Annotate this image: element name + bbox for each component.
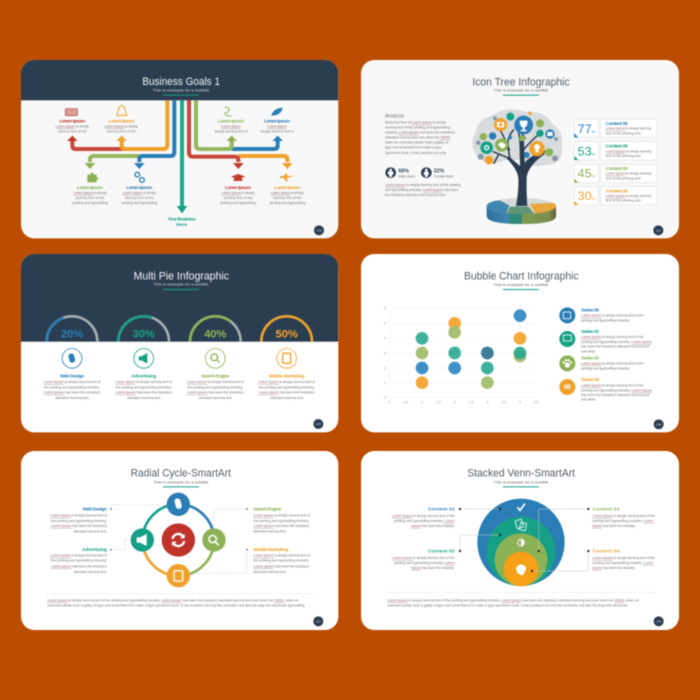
bubble chart: 6 bbox=[384, 307, 386, 311]
legend: printing and typesetting industry. Lorem Ipsum bbox=[581, 388, 652, 392]
analysis text: Body text here at Lorem Ipsum is simply bbox=[385, 121, 446, 125]
ring: 30% bbox=[118, 316, 169, 342]
ring: 40% bbox=[190, 316, 241, 342]
bubble chart: 4 bbox=[384, 337, 386, 341]
stat rows: text of the printing and bbox=[606, 131, 641, 135]
title: Business Goals 1 bbox=[142, 76, 220, 88]
callout: advertising bbox=[50, 547, 112, 574]
callout: web design: Lorem Ipsum has been the industry's bbox=[51, 524, 107, 528]
callout: mobile marketing: Lorem Ipsum is simply dummy text of bbox=[253, 554, 311, 558]
callout: search engine: Lorem Ipsum is simply dummy text of bbox=[253, 514, 311, 518]
column: web design: Lorem Ipsum has been the industry's bbox=[44, 391, 100, 395]
stat rows: % bbox=[592, 129, 596, 134]
callout: content 02: Content 02 bbox=[428, 549, 455, 555]
title underline bbox=[503, 288, 539, 291]
column: advertising bbox=[115, 348, 173, 400]
labels: dummy text of the bbox=[223, 196, 252, 200]
subtitle: This is example for a subtitle bbox=[493, 88, 549, 93]
column: advertising: Lorem Ipsum is simply dummy text of bbox=[115, 380, 173, 384]
labels: printing and typesetting bbox=[72, 201, 108, 205]
stat rows: text of the printing and bbox=[606, 176, 641, 180]
legend: Lorem Ipsum is simply dummy text of the bbox=[581, 361, 644, 365]
venn diagram bbox=[477, 499, 565, 586]
bubble chart: 1 bbox=[384, 381, 386, 385]
title: Radial Cycle-SmartArt bbox=[131, 468, 232, 480]
page number bbox=[654, 419, 664, 429]
ring: 50%: 50% bbox=[275, 328, 298, 340]
stat rows: % bbox=[592, 151, 596, 156]
footer text bbox=[387, 598, 639, 607]
stat rows: % bbox=[592, 174, 596, 179]
arrow network bbox=[67, 100, 293, 213]
bubble chart bbox=[384, 307, 539, 405]
column: search engine: Lorem Ipsum is simply dummy text of bbox=[187, 380, 245, 384]
series: blue bbox=[416, 309, 526, 374]
page number bbox=[654, 616, 664, 626]
legend: Lorem Ipsum is simply dummy text of the bbox=[581, 335, 644, 339]
callout: advertising: Lorem Ipsum is simply dummy text of bbox=[50, 554, 108, 558]
column: advertising: Advertising bbox=[131, 374, 156, 380]
labels: Lorem Ipsum bbox=[108, 118, 134, 124]
callout: search engine bbox=[246, 507, 311, 533]
callout: advertising: Advertising bbox=[82, 547, 107, 553]
labels: printing and typesetting bbox=[121, 201, 157, 205]
panel: Radial Cycle-SmartArt bbox=[21, 451, 338, 630]
panel: Stacked Venn-SmartArt bbox=[361, 451, 679, 630]
callout: content 02: Lorem Ipsum is simply dummy text of the bbox=[392, 556, 455, 560]
labels: Lorem Ipsum is simply bbox=[105, 124, 138, 128]
connectors bbox=[460, 509, 588, 571]
title underline bbox=[503, 94, 539, 97]
legend: Lorem Ipsum is simply dummy text of the bbox=[581, 314, 644, 318]
column: mobile marketing: Lorem Ipsum is simply dummy text of bbox=[258, 380, 316, 384]
page number bbox=[314, 225, 324, 235]
stat rows: Lorem Ipsum is simply dummy bbox=[606, 172, 651, 176]
bubble chart: 3 bbox=[486, 401, 488, 405]
stat rows: 77 bbox=[578, 122, 592, 136]
legend: Series 03 bbox=[581, 355, 599, 361]
column: advertising: the printing and typesetting industry. bbox=[116, 385, 172, 389]
callout: web design: Web Design bbox=[83, 507, 107, 513]
labels: dummy text of the bbox=[58, 129, 87, 133]
stat rows: Lorem Ipsum is simply dummy bbox=[606, 149, 651, 153]
column: mobile marketing: the printing and typesetting industry. bbox=[259, 385, 315, 389]
bubble chart: 0 bbox=[384, 396, 386, 400]
legend: Series 02 bbox=[581, 329, 599, 335]
series: teal bbox=[416, 332, 526, 374]
labels: printing and typesetting bbox=[269, 201, 305, 205]
footer text: Lorem Ipsum is simply dummy text of the printing and typesetting industry. Lorem Ipsum has been the industry's standard dummy text ever since the 1500s, when an bbox=[387, 598, 639, 602]
callout: content 02 bbox=[392, 549, 455, 570]
column: mobile marketing: Lorem Ipsum has been the industry's bbox=[258, 391, 315, 395]
analysis text: when an unknown printer took a galley of bbox=[385, 141, 449, 145]
legend bbox=[559, 307, 652, 402]
labels: Lorem Ipsum is simply bbox=[56, 124, 89, 128]
labels: Lorem Ipsum bbox=[225, 185, 251, 191]
subtitle: This is example for a subtitle bbox=[153, 282, 209, 287]
column: mobile marketing bbox=[258, 348, 316, 400]
callout: search engine: Lorem Ipsum has been the industry's bbox=[253, 524, 309, 528]
your business label: Your Business bbox=[168, 217, 196, 223]
labels: dummy text of the bbox=[125, 196, 154, 200]
callout: mobile marketing: the printing and typesetting industry. bbox=[253, 559, 309, 563]
column: web design: the printing and typesetting industry. bbox=[44, 385, 100, 389]
footer text: Lorem Ipsum is simply dummy text of the printing and typesetting industry. Lorem Ipsum has been the industry's standard dummy text ever since the 1500s, when an bbox=[47, 598, 299, 602]
callout: content 04: Lorem Ipsum is simply dummy text of the bbox=[592, 556, 655, 560]
callout: mobile marketing: standard dummy text. bbox=[253, 570, 287, 574]
stat rows: Lorem Ipsum is simply dummy bbox=[606, 194, 651, 198]
bubble chart: 2.5 bbox=[469, 401, 473, 405]
title: Stacked Venn-SmartArt bbox=[467, 468, 576, 480]
callout: content 01 bbox=[392, 507, 455, 528]
subtitle: This is example for a subtitle bbox=[153, 479, 209, 484]
column: advertising: Lorem Ipsum has been the industry's bbox=[115, 391, 172, 395]
labels: printing and typesetting bbox=[220, 201, 256, 205]
column: web design: Lorem Ipsum is simply dummy text of bbox=[44, 380, 101, 384]
stat rows: % bbox=[592, 196, 596, 201]
column: search engine: the printing and typesetting industry. bbox=[187, 385, 243, 389]
title underline bbox=[163, 94, 199, 97]
icon circles bbox=[514, 116, 533, 134]
page number bbox=[313, 419, 323, 429]
page number: 137 bbox=[316, 619, 321, 623]
stat rows: text of the printing and bbox=[606, 199, 641, 203]
title: Multi Pie Infographic bbox=[134, 270, 229, 282]
stat rows: text of the printing and bbox=[606, 154, 641, 158]
your business label bbox=[168, 217, 196, 228]
labels: Lorem Ipsum bbox=[264, 118, 290, 124]
lower text: and typesetting industry. Lorem Ipsum has been bbox=[385, 188, 458, 192]
labels: dummy text of the bbox=[273, 196, 302, 200]
panel: Bubble Chart Infographic bbox=[361, 254, 679, 432]
stat rows: Content 05 bbox=[606, 121, 628, 127]
labels: dummy text of the bbox=[75, 196, 104, 200]
callout: content 02: printing and typesetting industry. Lorem bbox=[394, 561, 455, 565]
ring: 30%: 30% bbox=[132, 328, 155, 340]
column: search engine bbox=[187, 348, 245, 400]
page number: 134 bbox=[656, 619, 661, 623]
bubble chart: 2 bbox=[384, 366, 386, 370]
tree illustration bbox=[472, 109, 562, 224]
callout: advertising: the printing and typesetting industry. bbox=[51, 559, 107, 563]
stat rows: Content 05 bbox=[606, 166, 628, 172]
labels: Lorem Ipsum bbox=[274, 185, 300, 191]
title: Bubble Chart Infographic bbox=[464, 270, 579, 282]
callout: mobile marketing: Lorem Ipsum has been the industry's bbox=[253, 564, 309, 568]
panel: Multi Pie Infographic bbox=[21, 254, 338, 432]
callout: search engine: standard dummy text. bbox=[253, 529, 287, 533]
legend: printing and typesetting industry. bbox=[581, 366, 630, 370]
page number: 109 bbox=[317, 228, 322, 232]
callout: mobile marketing bbox=[246, 547, 311, 574]
gender stats: 32% bbox=[434, 168, 445, 174]
callout: content 04 bbox=[592, 549, 655, 570]
bubble chart: 4.5 bbox=[534, 401, 539, 405]
analysis text: type and scrambled it to make a type bbox=[385, 146, 442, 150]
ring: 20%: 20% bbox=[61, 328, 83, 340]
callout: content 03 bbox=[592, 507, 655, 528]
stat rows: Lorem Ipsum is simply dummy bbox=[606, 127, 651, 131]
callout: advertising: standard dummy text. bbox=[74, 570, 107, 574]
title underline bbox=[503, 486, 539, 487]
bubble chart: 5 bbox=[384, 322, 386, 326]
callout: content 01: printing and typesetting industry. Lorem bbox=[394, 519, 455, 523]
subtitle: This is example for a subtitle bbox=[153, 88, 210, 93]
trunk bbox=[507, 140, 545, 206]
title underline bbox=[163, 486, 199, 487]
column: search engine: Lorem Ipsum has been the industry's bbox=[187, 391, 244, 395]
legend: Series 04 bbox=[581, 377, 599, 383]
labels: Lorem Ipsum bbox=[59, 118, 85, 124]
title: Icon Tree Infographic bbox=[472, 76, 570, 88]
legend: has been the industry's standard dummy text bbox=[581, 393, 650, 397]
stat rows: 45 bbox=[578, 167, 592, 181]
legend: has been the industry's standard dummy text bbox=[581, 345, 650, 349]
cloud bbox=[472, 109, 562, 166]
column: search engine: standard dummy text bbox=[199, 396, 233, 400]
bubble chart: 3 bbox=[384, 351, 386, 355]
icons bbox=[65, 106, 294, 182]
analysis text: standard dummy text ever since the 1500s, bbox=[385, 136, 451, 140]
labels: Lorem Ipsum bbox=[126, 185, 152, 191]
labels: Lorem Ipsum is simply bbox=[73, 191, 107, 195]
column: web design: Web Design bbox=[60, 374, 84, 380]
labels: simply dummy text of bbox=[260, 129, 295, 133]
legend: Lorem Ipsum is simply dummy text of the bbox=[581, 383, 644, 387]
column: mobile marketing: Mobile Marketing bbox=[269, 374, 305, 380]
stat rows: 30 bbox=[578, 189, 592, 203]
callout: web design: the printing and typesetting industry. bbox=[51, 519, 107, 523]
footer text: unknown printer took a galley of type and scrambled it to make a type specimen book. It has survived not only five centuries, but also the leap into electronic bbox=[387, 603, 627, 607]
gender stats bbox=[385, 167, 454, 178]
footer text bbox=[47, 598, 305, 607]
lower text bbox=[385, 183, 461, 197]
connector dots bbox=[459, 508, 589, 572]
panel: Icon Tree Infographic bbox=[361, 60, 679, 238]
callout: content 03: Ipsum has been the industry. bbox=[592, 524, 636, 528]
title underline bbox=[163, 288, 199, 291]
stat rows: 53 bbox=[578, 144, 592, 158]
lower text: Lorem Ipsum is simply dummy text of the printing bbox=[385, 183, 461, 187]
labels: Lorem Ipsum bbox=[221, 124, 241, 128]
header band bbox=[21, 254, 338, 342]
series: green bbox=[416, 326, 526, 389]
callout: content 04: Content 04 bbox=[593, 549, 620, 555]
cycle diagram bbox=[131, 493, 226, 587]
column: search engine: Search Engine bbox=[201, 374, 230, 380]
ring: 40%: 40% bbox=[204, 328, 226, 340]
callout: mobile marketing: Mobile Marketing bbox=[253, 547, 288, 553]
page number bbox=[653, 225, 663, 235]
page number: 129 bbox=[316, 422, 321, 426]
callout: content 03: printing and typesetting industry. Lorem bbox=[592, 519, 654, 523]
bubble chart: 1 bbox=[421, 401, 423, 405]
lower text: the industry's standard dummy text ever. bbox=[385, 193, 447, 197]
legend: Series 05 bbox=[581, 308, 599, 314]
callout: content 03: Lorem Ipsum is simply dummy text of the bbox=[592, 514, 655, 518]
ring: 50% bbox=[261, 316, 312, 342]
callout: search engine: Search Engine bbox=[253, 507, 282, 513]
labels: Lorem Ipsum is simply bbox=[221, 191, 255, 195]
callout: web design: standard dummy text. bbox=[74, 529, 107, 533]
subtitle: This is example for a subtitle bbox=[493, 479, 549, 484]
gender stats: 68% bbox=[398, 168, 409, 174]
connectors bbox=[111, 505, 247, 573]
bubble chart: 2 bbox=[454, 401, 456, 405]
gender stats: Male Users bbox=[398, 174, 415, 178]
column: web design bbox=[44, 348, 101, 400]
labels: Lorem Ipsum bbox=[267, 124, 287, 128]
page number: 114 bbox=[656, 228, 661, 232]
your business label: Here bbox=[176, 222, 187, 228]
legend: ever since. bbox=[581, 398, 596, 402]
bubble chart: 0.5 bbox=[403, 401, 408, 405]
gender stats: Female Users bbox=[434, 174, 454, 178]
callout: web design: Lorem Ipsum is simply dummy text of bbox=[50, 514, 108, 518]
labels: Lorem Ipsum bbox=[218, 118, 244, 124]
analysis text: industry. Lorem Ipsum has been the industry's bbox=[385, 131, 455, 135]
page number bbox=[313, 616, 323, 626]
bubble chart: 4 bbox=[519, 401, 521, 405]
legend: printing and typesetting industry. bbox=[581, 319, 630, 323]
callout: content 01: Content 01 bbox=[428, 507, 455, 513]
callout: content 04: printing and typesetting industry. Lorem bbox=[592, 561, 654, 565]
callout: web design bbox=[50, 507, 112, 533]
analysis text: dummy text of the printing and typesetting bbox=[385, 126, 450, 130]
subtitle: This is example for a subtitle bbox=[493, 282, 549, 287]
labels: dummy text of the bbox=[107, 129, 136, 133]
labels: simply dummy text of bbox=[214, 129, 249, 133]
labels: Lorem Ipsum bbox=[77, 185, 103, 191]
series: orange bbox=[416, 317, 526, 389]
analysis text: Analysis bbox=[385, 114, 405, 120]
pedestal bbox=[483, 197, 560, 224]
callout: content 01: Ipsum has been the industry. bbox=[411, 524, 455, 528]
column: mobile marketing: standard dummy text bbox=[270, 396, 304, 400]
ring: 20% bbox=[47, 316, 97, 342]
labels: Lorem Ipsum is simply bbox=[123, 191, 156, 195]
bubble chart: 0 bbox=[388, 401, 390, 405]
labels bbox=[56, 118, 305, 205]
bubble chart: 3.5 bbox=[501, 401, 506, 405]
callout: content 03: Content 03 bbox=[593, 507, 620, 513]
callout: content 01: Lorem Ipsum is simply dummy text of the bbox=[392, 514, 455, 518]
callout: advertising: Lorem Ipsum has been the industry's bbox=[51, 564, 107, 568]
page number: 138 bbox=[656, 422, 661, 426]
stat rows: Content 05 bbox=[606, 188, 628, 194]
callout: content 04: Ipsum has been the industry. bbox=[592, 566, 636, 570]
header band bbox=[21, 60, 338, 100]
stat rows bbox=[574, 119, 657, 205]
column: web design: standard dummy text bbox=[55, 396, 90, 400]
footer text: unknown printer took a galley of type and scrambled it to make a type specimen book. It has survived not only five centuries, but also the leap into electronic typesetting bbox=[47, 603, 305, 607]
callout: search engine: the printing and typesetting industry. bbox=[253, 519, 309, 523]
bubble chart: 1.5 bbox=[436, 401, 441, 405]
column: advertising: standard dummy text bbox=[127, 396, 161, 400]
stat rows: Content 05 bbox=[606, 144, 628, 150]
legend: ever since. bbox=[581, 349, 596, 353]
legend: printing and typesetting industry. Lorem Ipsum bbox=[581, 340, 652, 344]
analysis text bbox=[385, 114, 455, 155]
analysis text: specimen book. It has survived not only bbox=[385, 151, 446, 155]
labels: Lorem Ipsum is simply bbox=[271, 191, 304, 195]
callout: content 02: Ipsum has been the industry. bbox=[411, 566, 455, 570]
panel: Business Goals 1 bbox=[21, 60, 338, 238]
